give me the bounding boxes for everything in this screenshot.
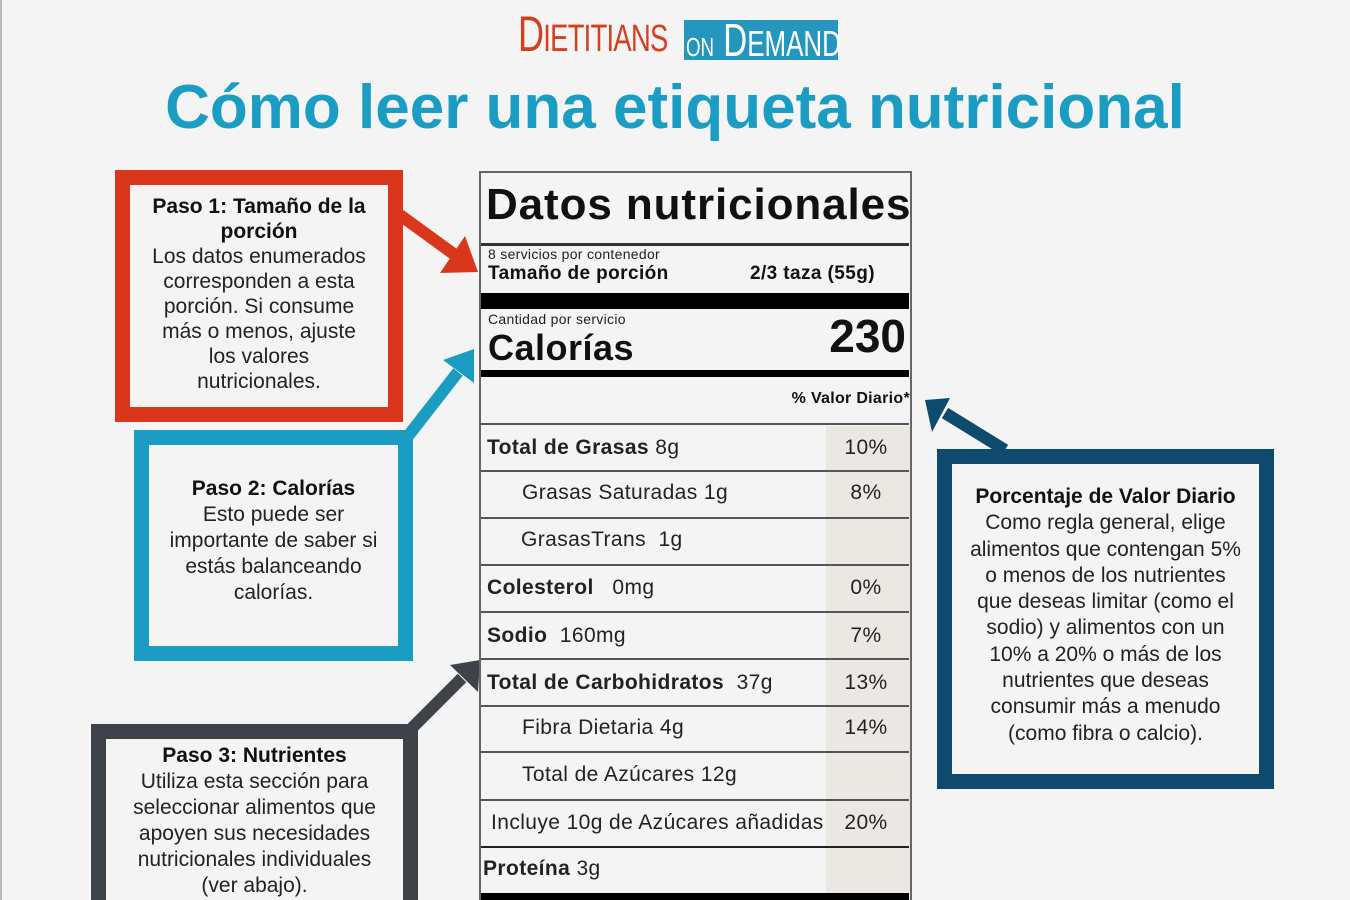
text: daily value: 10% a 20% o más de los — [989, 643, 1222, 666]
nutrient rows: Sodio 160mg — [487, 624, 626, 647]
heading: step 3: Paso 3: Nutrientes — [162, 744, 347, 767]
nutrient rows: Colesterol 0mg — [487, 576, 654, 599]
serving size: Tamaño de porción — [488, 263, 669, 284]
nutrient rows: 7% — [850, 624, 882, 647]
text: step 2: importante de saber si — [170, 529, 377, 552]
text: step 1: más o menos, ajuste — [162, 320, 356, 343]
nutrient rows: GrasasTrans 1g — [521, 528, 683, 551]
text: daily value: (como fibra o calcio). — [1008, 722, 1203, 745]
text: step 2: calorías. — [234, 581, 313, 604]
row: added sugars — [491, 811, 888, 834]
serving size — [488, 263, 875, 284]
nutrient rows: 14% — [844, 716, 888, 739]
nutrient rows: Grasas Saturadas 1g — [522, 481, 728, 504]
heading: step 2: Paso 2: Calorías — [192, 477, 355, 500]
text: step 3: seleccionar alimentos que — [133, 796, 376, 819]
nutrient rows: 13% — [844, 671, 888, 694]
row: fiber — [522, 716, 888, 739]
text: step 1: nutricionales. — [197, 370, 321, 393]
text: step 1 — [152, 245, 366, 393]
nutrient rows: Total de Grasas 8g — [487, 436, 679, 459]
row: fat — [487, 436, 888, 459]
text: daily value: nutrientes que deseas — [1002, 669, 1209, 692]
arrow: step 1 — [400, 215, 478, 273]
row: cholesterol — [487, 576, 882, 599]
servings: 8 servicios por contenedor — [488, 246, 660, 262]
text: step 3: Utiliza esta sección para — [141, 770, 368, 793]
text: daily value — [970, 511, 1241, 745]
text: step 2: Esto puede ser — [203, 503, 344, 526]
arrow: daily value — [925, 398, 1005, 450]
panel: daily value — [937, 449, 1274, 789]
label title: Datos nutricionales — [486, 180, 911, 229]
text: step 3: nutricionales individuales — [138, 848, 371, 871]
text: daily value: consumir más a menudo — [991, 695, 1220, 718]
nutrient rows: Total de Azúcares 12g — [522, 763, 737, 786]
title: Cómo leer una etiqueta nutricional — [165, 73, 1185, 142]
panel: step 3 — [91, 724, 418, 900]
text: step 1: corresponden a esta — [163, 270, 355, 293]
row: sodium — [487, 624, 882, 647]
left page edge — [0, 0, 2, 900]
text: step 3: (ver abajo). — [201, 874, 308, 897]
logo: ON DEMAND — [686, 14, 841, 66]
panel: step 1 — [115, 170, 403, 422]
row: saturated — [522, 481, 882, 504]
nutrient rows: Fibra Dietaria 4g — [522, 716, 684, 739]
text: Calorías — [488, 327, 634, 368]
text: daily value: alimentos que contengan 5% — [970, 538, 1241, 561]
text: step 1: porción. Si consume — [164, 295, 354, 318]
text: step 2: estás balanceando — [185, 555, 362, 578]
text: step 3: apoyen sus necesidades — [139, 822, 370, 845]
logo: DIETITIANS — [518, 6, 668, 62]
text: daily value: sodio) y alimentos con un — [986, 616, 1225, 639]
text: step 1: los valores — [209, 345, 309, 368]
panel: step 2 — [134, 430, 413, 661]
text: daily value: o menos de los nutrientes — [985, 564, 1226, 587]
nutrient rows: Total de Carbohidratos 37g — [487, 671, 773, 694]
text: daily value: que deseas limitar (como el — [977, 590, 1234, 613]
text: 230 — [829, 310, 906, 362]
text: step 3 — [133, 770, 376, 897]
arrow: step 2 — [405, 349, 474, 440]
heading: daily value: Porcentaje de Valor Diario — [975, 485, 1236, 508]
row: carbs — [487, 671, 888, 694]
serving size: 2/3 taza (55g) — [750, 263, 875, 284]
calories: Cantidad por servicio — [488, 311, 626, 327]
nutrient rows: 20% — [844, 811, 888, 834]
nutrient rows: Incluye 10g de Azúcares añadidas — [491, 811, 824, 834]
nutrient rows: Proteína 3g — [483, 857, 601, 880]
nutrient rows: 10% — [844, 436, 888, 459]
text: step 2 — [170, 503, 377, 604]
nutrient rows: 0% — [850, 576, 882, 599]
heading: step 1: porción — [220, 220, 298, 243]
logo — [518, 6, 841, 66]
nutrient rows — [483, 436, 888, 880]
text: step 1: Los datos enumerados — [152, 245, 366, 268]
heading: step 1 — [152, 195, 366, 243]
text: daily value: Como regla general, elige — [985, 511, 1226, 534]
nutrition label — [479, 171, 912, 900]
shaded %DV column — [826, 426, 910, 900]
nutrient rows: 8% — [850, 481, 882, 504]
heading: step 1: Paso 1: Tamaño de la — [152, 195, 366, 218]
dv header: % Valor Diario* — [792, 390, 910, 407]
arrow: step 3 — [410, 660, 480, 730]
